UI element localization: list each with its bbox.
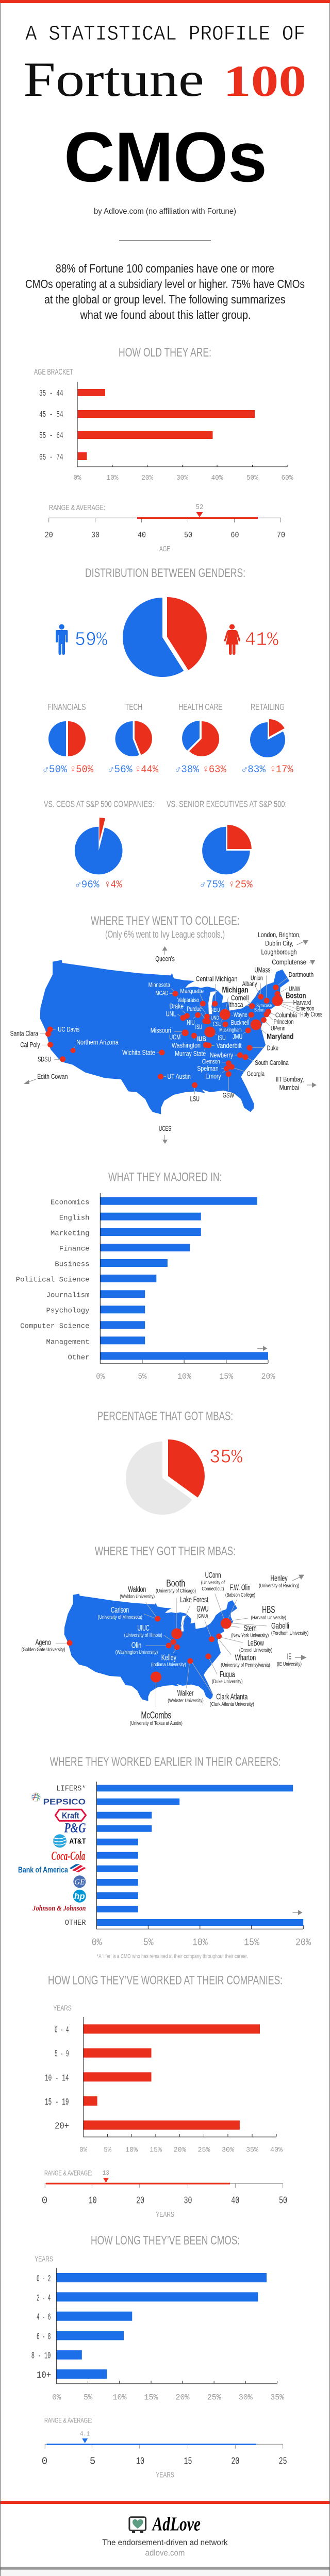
panel: health care gender split (175, 702, 227, 776)
range and average: CMO tenure: 10 (136, 2456, 144, 2467)
bar chart: majors: 15% (219, 1372, 234, 1381)
labels on map: UT Austin (167, 1072, 191, 1080)
bar chart: company tenure: YEARS (53, 2004, 72, 2013)
labels on map (58, 981, 272, 1080)
panel: tech gender split (108, 702, 159, 776)
labels outside map: Cornell (231, 993, 249, 1002)
heading: what they majored in: WHAT THEY MAJORED IN: (108, 1171, 222, 1184)
logo: Johnson & Johnson: Johnson & Johnson (32, 1904, 86, 1912)
labels outside map: SDSU (38, 1055, 51, 1063)
panel: versus CEOs at S&P 500: ♂96% (75, 879, 100, 891)
logo: HP (73, 1890, 86, 1903)
labels on map: Wichita State (122, 1048, 155, 1057)
labels outside map (10, 930, 323, 1103)
labels outside map: LSU (190, 1095, 200, 1103)
labels outside map: Central Michigan (196, 974, 237, 982)
school labels: (University of Reading) (259, 1583, 299, 1589)
byline: by Adlove.com (no affiliation with Fortune) (94, 207, 236, 216)
bar chart: age bracket: 65 - 74 (39, 453, 63, 463)
labels on map: Minnesota (148, 981, 170, 989)
top red bar (0, 0, 330, 3)
logo: P&G: P&G (64, 1821, 86, 1836)
labels on map: Newberry (210, 1050, 233, 1059)
subheading: ivy league note: (Only 6% went to Ivy League schools.) (105, 929, 225, 940)
school labels: (Fordham University) (271, 1630, 308, 1636)
bar chart: majors: Journalism (46, 1292, 90, 1300)
title word: CMOs: CMOs (64, 118, 267, 197)
school dots (67, 1616, 232, 1683)
labels outside map: Boston (286, 992, 306, 1001)
labels on map: Murray State (175, 1049, 206, 1057)
logo: GE (73, 1875, 86, 1888)
bar chart: age bracket: 60% (282, 474, 293, 482)
label: other: OTHER (65, 1919, 86, 1927)
Adlove logo (102, 2514, 228, 2558)
panel: financials gender split: ♀50% (70, 764, 94, 776)
range and average: CMO tenure: 20 (231, 2456, 239, 2467)
labels on map: Clemson (202, 1057, 220, 1065)
bar chart: age bracket: 55 - 64 (39, 431, 63, 441)
school labels: GWU (196, 1605, 208, 1614)
range and average: age (45, 503, 285, 553)
bar chart: prior employers: 5% (143, 1937, 154, 1948)
bar chart: majors: English (59, 1214, 90, 1222)
panel: versus CEOs at S&P 500: ♀4% (105, 879, 123, 891)
labels on map: CSU (213, 1020, 221, 1028)
school labels: (University of Illinois) (124, 1632, 162, 1638)
panel: financials gender split: FINANCIALS (47, 702, 86, 712)
panel: tech gender split: ♀44% (135, 764, 159, 776)
panel: health care gender split: ♀63% (203, 764, 227, 776)
labels on map: NEIU (211, 1007, 220, 1013)
logo: PepsiCo: PEPSICO (43, 1798, 86, 1807)
url: adlove.com (145, 2548, 185, 2558)
school labels: LeBow (248, 1639, 264, 1648)
panel: tech gender split: TECH (125, 702, 142, 712)
labels on map: Wayne (234, 1011, 248, 1019)
arrows pointing off the map (24, 940, 317, 1088)
labels outside map: Georgia (247, 1070, 265, 1078)
bar chart: company tenure: 20+ (55, 2122, 69, 2132)
range and average: age: 30 (91, 531, 100, 540)
range and average: company tenure: 13 (103, 2169, 109, 2177)
bar chart: prior employers: 0% (92, 1937, 102, 1948)
labels on map: Missouri (151, 1026, 171, 1035)
footnote: lifer definition: *A ‘lifer’ is a CMO who has remained at their company throughout their career. (97, 1954, 248, 1960)
range and average: age: 50 (184, 531, 192, 540)
school labels: Ageno (36, 1638, 51, 1647)
title line: a statistical profile of: A STATISTICAL PROFILE OF (25, 23, 305, 46)
range and average: CMO tenure: 5 (90, 2456, 95, 2467)
range and average: company tenure: YEARS (156, 2210, 174, 2219)
logo: GE: GE (74, 1878, 85, 1887)
US outline (64, 1594, 237, 1701)
labels outside map: IIT Bombay, (276, 1075, 304, 1083)
pie chart: gender distribution (123, 597, 207, 677)
bar chart: majors: Marketing (51, 1230, 90, 1238)
range and average: age: 20 (45, 531, 53, 540)
range and average: company tenure: 10 (89, 2195, 97, 2207)
bar chart: age bracket: 20% (141, 474, 154, 482)
labels on map: MCAD (156, 990, 169, 997)
school labels: UConn (205, 1571, 221, 1580)
range and average: age: 52 (196, 503, 203, 512)
heading: where they went to college: WHERE THEY WENT TO COLLEGE: (91, 914, 239, 928)
range and average: CMO tenure (42, 2416, 287, 2479)
bar chart: company tenure: 5% (104, 2146, 112, 2155)
labels on map: Northern Arizona (76, 1038, 119, 1046)
school labels: (Clark Atlanta University) (210, 1701, 254, 1707)
school labels: F.W. Olin (230, 1584, 251, 1592)
panel: health care gender split: ♂38% (175, 764, 200, 776)
school labels: IE (287, 1653, 291, 1662)
panel: versus senior executives at S&P 500: ♂75% (200, 879, 225, 891)
bar chart: majors: Economics (51, 1198, 90, 1207)
labels outside map: South Carolina (255, 1059, 289, 1066)
bar chart: age bracket: 45 - 54 (39, 410, 63, 420)
labels outside map: Ithaca (228, 1001, 243, 1009)
school labels: (University of (201, 1580, 225, 1586)
range and average: company tenure: 20 (136, 2195, 144, 2207)
school labels: (University of Minnesota) (98, 1614, 142, 1620)
logo: PepsiCo (31, 1793, 86, 1807)
heading: how long they've been CMOs: HOW LONG THEY’VE BEEN CMOS: (91, 2234, 240, 2248)
labels on map: ISU (195, 1023, 202, 1031)
school labels: Lake Forest (180, 1596, 208, 1604)
school labels: McCombs (141, 1710, 171, 1721)
intro paragraph: 88% of Fortune 100 companies have one or more (56, 262, 274, 275)
range and average: company tenure: 40 (231, 2195, 239, 2207)
bar chart: majors: Other (68, 1353, 90, 1362)
range and average: company tenure: 30 (184, 2195, 192, 2207)
bar chart: CMO tenure: 35% (270, 2393, 285, 2402)
panel: versus CEOs at S&P 500: VS. CEOS AT S&P 500 COMPANIES: (44, 799, 154, 809)
stat: 35 percent: 35% (209, 1446, 242, 1468)
panel: retailing gender split: ♀17% (270, 764, 294, 776)
bar chart: majors: Finance (59, 1245, 90, 1253)
heading: where they got their MBAs: WHERE THEY GOT THEIR MBAS: (95, 1544, 236, 1558)
bar chart: majors: Management (46, 1338, 90, 1346)
school labels: Kelley (161, 1653, 176, 1662)
bar chart: CMO tenure: 10+ (37, 2370, 51, 2381)
labels on map: Seton (254, 1008, 265, 1013)
labels on map: JMU (233, 1032, 242, 1041)
labels outside map: Santa Clara (10, 1029, 38, 1038)
icon: man (56, 624, 68, 655)
panel: financials gender split: ♂50% (43, 764, 68, 776)
panel: versus senior executives at S&P 500 (167, 799, 287, 891)
labels outside map: UMass (255, 966, 270, 975)
bar chart: company tenure: 15% (150, 2146, 162, 2155)
school labels: Gabelli (271, 1622, 289, 1631)
school labels: Connecticut) (202, 1586, 224, 1592)
bar chart: age bracket (34, 368, 293, 482)
school labels: (Duke University) (212, 1679, 243, 1685)
bar chart: prior employers: 10% (192, 1937, 208, 1948)
labels outside map: Michigan (222, 986, 249, 995)
bar chart: majors: 0% (96, 1372, 105, 1381)
bar chart: CMO tenure: 6 - 8 (37, 2332, 51, 2342)
map: colleges (10, 930, 323, 1144)
labels on map: Emory (205, 1072, 221, 1080)
panel: versus CEOs at S&P 500 (44, 799, 154, 891)
labels on map: UC Davis (58, 1025, 79, 1033)
wordmark: AdLove (152, 2514, 201, 2535)
school labels: Henley (270, 1574, 288, 1583)
gray divider bar (0, 2567, 330, 2570)
logo: Kraft: Kraft (62, 1810, 79, 1820)
labels on map: UNL (166, 1010, 176, 1018)
school labels: Carlson (111, 1606, 129, 1615)
bar chart: CMO tenure: 0 - 2 (37, 2274, 51, 2284)
lower red bar (0, 2501, 330, 2504)
bar chart: company tenure: 0 - 4 (55, 2025, 69, 2036)
labels outside map: Emerson (296, 1004, 314, 1012)
bar chart: company tenure: 10% (125, 2146, 138, 2155)
icon: tv with heart (129, 2517, 146, 2533)
school labels: (Waldon University) (120, 1594, 155, 1600)
bar chart: age bracket: AGE BRACKET (34, 368, 73, 377)
bar chart: prior employers: 15% (244, 1937, 260, 1948)
range and average: age: RANGE & AVERAGE: (49, 503, 105, 512)
bar chart: age bracket: 35 - 44 (39, 389, 63, 399)
range and average: CMO tenure: 4.1 (80, 2430, 90, 2437)
labels on map: UND (211, 1015, 219, 1021)
intro paragraph: at the global or group level. The following summarizes (44, 293, 286, 306)
range and average: age: 40 (138, 531, 146, 540)
labels on map: ISU (218, 1033, 226, 1042)
school labels: (Washington University) (116, 1649, 158, 1655)
range and average: age: 60 (231, 531, 239, 540)
range and average: company tenure (42, 2169, 287, 2219)
bar chart: company tenure: 25% (198, 2146, 210, 2155)
range and average: company tenure: 0 (42, 2195, 47, 2207)
school labels: (IE University) (277, 1661, 302, 1667)
tagline: The endorsement-driven ad network (102, 2538, 228, 2547)
bar chart: CMO tenure (31, 2255, 285, 2402)
bar chart: CMO tenure: 25% (207, 2393, 221, 2402)
labels outside map: UPenn (271, 1024, 286, 1032)
title word: Fortune: Fortune (23, 52, 204, 107)
school labels: (Drexel University) (239, 1647, 272, 1653)
range and average: CMO tenure: YEARS (156, 2470, 174, 2479)
panel: retailing gender split: ♂83% (242, 764, 266, 776)
logo: Kraft (55, 1809, 86, 1821)
school labels: (New York University) (231, 1633, 269, 1639)
school labels: HBS (262, 1605, 275, 1616)
pie chart: MBA share (126, 1439, 205, 1515)
labels outside map: Mumbai (279, 1083, 299, 1092)
school labels: Fuqua (220, 1670, 235, 1679)
labels outside map: Dublin City, (265, 939, 293, 947)
school labels: (Golden Gate University) (22, 1647, 65, 1653)
labels on map: UCM (169, 1033, 180, 1041)
logo: AT&T: AT&T (69, 1837, 86, 1846)
labels outside map: Complutense (272, 958, 306, 966)
labels on map: Bucknell (231, 1019, 249, 1026)
bar chart: majors: 5% (138, 1372, 147, 1381)
bar chart: CMO tenure: 8 - 10 (31, 2351, 51, 2362)
labels outside map: Columbia (275, 1011, 297, 1019)
bar chart: company tenure: 30% (222, 2146, 235, 2155)
labels outside map: Union (251, 974, 263, 981)
arrows pointing off the map (292, 1574, 306, 1660)
arrow: other continues (257, 1346, 267, 1351)
labels outside map: Harvard (293, 998, 311, 1006)
labels on map: Purdue (187, 1005, 202, 1013)
bar chart: CMO tenure: 2 - 4 (37, 2293, 51, 2303)
range and average: company tenure: 50 (279, 2195, 287, 2207)
labels outside map: Cal Poly (20, 1041, 40, 1049)
bar chart: age bracket: 10% (106, 474, 119, 482)
labels outside map: Queen’s (155, 955, 175, 963)
labels outside map: Princeton (274, 1018, 293, 1025)
labels outside map: Dartmouth (289, 971, 314, 978)
connector lines (56, 1594, 267, 1707)
labels on map: Spelman (197, 1064, 219, 1072)
labels outside map: London, Brighton, (258, 930, 301, 939)
labels outside map: Loughborough (261, 947, 297, 956)
school labels: (University of Texas at Austin) (130, 1720, 183, 1726)
bar chart: age bracket: 50% (246, 474, 258, 482)
bar chart: CMO tenure: 20% (175, 2393, 190, 2402)
labels on map: Marquette (180, 987, 204, 994)
school labels: Waldon (128, 1585, 146, 1594)
bar chart: company tenure: 40% (270, 2146, 283, 2155)
map: MBA schools (22, 1571, 308, 1726)
labels on map: NIU (187, 1019, 195, 1026)
footer background (0, 2569, 330, 2576)
intro paragraph: what we found about this latter group. (80, 308, 251, 321)
school labels: (Babson College) (225, 1592, 255, 1598)
panel: retailing gender split: RETAILING (251, 702, 285, 712)
range and average: company tenure: RANGE & AVERAGE: (44, 2169, 92, 2177)
labels on map: Drake (170, 1002, 184, 1010)
bar chart: majors: Business (55, 1261, 90, 1269)
bar chart: majors: Psychology (46, 1307, 90, 1315)
bar chart: company tenure: 5 - 9 (55, 2049, 69, 2060)
labels on map: Vanderbilt (217, 1041, 242, 1049)
school labels: Olin (131, 1641, 141, 1650)
bar chart: majors: Political Science (16, 1276, 90, 1284)
bar chart: CMO tenure: YEARS (35, 2255, 53, 2263)
bar chart: majors (16, 1193, 275, 1381)
intro paragraph (25, 262, 305, 321)
heading: distribution between genders: DISTRIBUTION BETWEEN GENDERS: (85, 566, 245, 580)
range and average: CMO tenure: RANGE & AVERAGE: (44, 2416, 92, 2425)
labels outside map: GSW (223, 1091, 234, 1099)
school labels: (GWU) (197, 1613, 208, 1619)
school labels: Clark Atlanta (216, 1693, 248, 1702)
logo: HP: hp (74, 1891, 85, 1901)
bar chart: majors: 10% (177, 1372, 191, 1381)
school labels: (Webster University) (168, 1698, 204, 1704)
bar chart: company tenure: 15 - 19 (45, 2097, 69, 2108)
bar chart: company tenure: 20% (174, 2146, 186, 2155)
labels on map: Muskingham (219, 1027, 242, 1033)
bar chart: CMO tenure: 10% (112, 2393, 127, 2402)
bar chart: company tenure: 35% (246, 2146, 259, 2155)
bar chart: CMO tenure: 5% (84, 2393, 93, 2402)
panel: financials gender split (43, 702, 94, 776)
US outline (40, 960, 300, 1114)
panel: retailing gender split (242, 702, 294, 776)
school labels: (Harvard University) (251, 1615, 286, 1621)
logo: AT&T (53, 1834, 86, 1848)
labels outside map: Maryland (267, 1032, 293, 1041)
bar chart: prior employers (18, 1782, 311, 1960)
bar chart: company tenure: 10 - 14 (45, 2073, 69, 2083)
bar chart: age bracket: 0% (73, 474, 81, 482)
school labels: (University of Chicago) (156, 1588, 196, 1594)
panel: versus senior executives at S&P 500: VS. SENIOR EXECUTIVES AT S&P 500: (167, 799, 287, 809)
label: UCES: UCES (159, 1124, 171, 1132)
logo: Bank of America: Bank of America (18, 1866, 68, 1875)
arrow: other continues (292, 1910, 302, 1915)
arrow: UCES down (162, 1135, 168, 1144)
labels on map: IUB (197, 1035, 206, 1043)
bar chart: prior employers: 20% (295, 1937, 311, 1948)
school labels: Wharton (235, 1654, 256, 1663)
school labels: Stern (244, 1624, 257, 1633)
range and average: age: AGE (159, 545, 170, 553)
heading: how old they are: HOW OLD THEY ARE: (119, 346, 211, 360)
range and average: age: 70 (277, 531, 285, 540)
school labels: (University of Pennsylvania) (221, 1662, 270, 1668)
range and average: CMO tenure: 0 (42, 2456, 47, 2467)
stat: 59 percent men: 59% (75, 629, 107, 651)
labels outside map: Albany (242, 980, 257, 988)
stat: 41 percent women: 41% (245, 629, 278, 651)
range and average: CMO tenure: 25 (279, 2456, 287, 2467)
panel: versus senior executives at S&P 500: ♀25% (229, 879, 253, 891)
labels outside map: Edith Cowan (37, 1072, 68, 1080)
heading: percentage that got MBAs: PERCENTAGE THAT GOT MBAS: (97, 1410, 233, 1423)
panel: health care gender split: HEALTH CARE (178, 702, 223, 712)
title (23, 23, 306, 216)
school labels: Walker (177, 1689, 194, 1698)
college dots (45, 985, 283, 1088)
bar chart: age bracket: 40% (211, 474, 223, 482)
bar chart: majors: 20% (261, 1372, 275, 1381)
bar chart: CMO tenure: 0% (52, 2393, 61, 2402)
labels on map: Washington (172, 1041, 201, 1049)
icon: woman (224, 624, 240, 655)
labels on map: Valparaiso (177, 996, 199, 1004)
school labels: (Indiana University) (151, 1662, 186, 1668)
bar chart: CMO tenure: 30% (239, 2393, 253, 2402)
bar chart: majors: Computer Science (20, 1323, 90, 1331)
school labels: UIUC (137, 1624, 150, 1633)
label: lifers: LIFERS* (56, 1785, 86, 1793)
school labels: Booth (166, 1578, 185, 1589)
labels outside map: Duke (267, 1044, 278, 1052)
school labels (22, 1571, 308, 1726)
logo: Coca-Cola: Coca-Cola (52, 1850, 85, 1863)
bar chart: CMO tenure: 4 - 6 (37, 2313, 51, 2323)
labels on map: Syracuse (256, 1003, 272, 1009)
bar chart: company tenure (45, 2004, 283, 2155)
title number: 100: 100 (223, 56, 306, 106)
bar chart: company tenure: 0% (79, 2146, 88, 2155)
bar chart: age bracket: 30% (176, 474, 189, 482)
bar chart: CMO tenure: 15% (144, 2393, 158, 2402)
range and average: CMO tenure: 15 (184, 2456, 192, 2467)
labels outside map: UNW (289, 985, 301, 992)
panel: tech gender split: ♂56% (108, 764, 133, 776)
